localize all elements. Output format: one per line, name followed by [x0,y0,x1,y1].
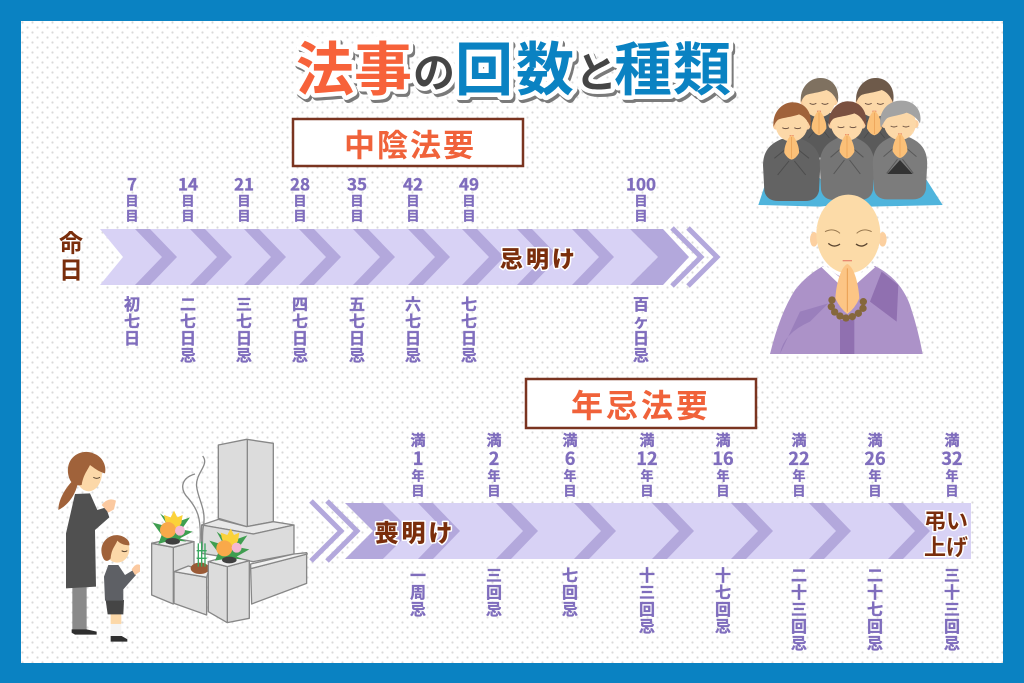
day labels above top timeline: 目 [181,206,195,224]
title: 事 [354,23,412,107]
woman [58,452,116,635]
memorial names below top timeline: 日 [236,325,252,349]
heading box: 中陰法要: 中陰法要 [344,120,476,166]
gravestone [202,439,307,604]
flowers left [153,511,193,545]
year labels above bottom timeline: 22 [788,445,810,471]
memorial names below bottom timeline: 忌 [486,596,502,620]
memorial names below bottom timeline: 忌 [410,596,426,620]
memorial names below top timeline: 忌 [292,342,308,366]
memorial names below top timeline: 日 [461,325,477,349]
memorial names below bottom timeline: 三 [639,579,655,603]
memorial names below bottom timeline: 回 [639,596,655,620]
memorial names below top timeline: 七 [124,308,140,332]
day labels above top timeline: 目 [406,190,420,210]
label: 喪明け: 喪明け [374,514,456,548]
day labels above top timeline: 目 [634,206,648,224]
memorial names below top timeline: 七 [180,308,196,332]
year labels above bottom timeline: 目 [640,480,654,500]
day labels above top timeline: 42 [403,170,423,196]
memorial names below bottom timeline: 忌 [944,630,960,654]
year labels above bottom timeline: 12 [636,445,658,471]
title [296,23,731,107]
title: 法 [296,23,354,107]
memorial names below bottom timeline: 回 [715,596,731,620]
title: 類 [673,23,731,107]
memorial names below top timeline: 忌 [180,342,196,366]
day labels above top timeline: 目 [634,190,648,210]
label: 忌明け: 忌明け [500,240,578,274]
illustration: mother and child at grave [58,439,307,642]
memorial names below bottom timeline [410,562,960,654]
memorial names below bottom timeline: 周 [410,579,426,603]
year labels above bottom timeline: 年 [868,466,882,484]
day labels above top timeline: 14 [178,170,198,196]
memorial names below top timeline: 日 [292,325,308,349]
year labels above bottom timeline: 満 [410,430,426,450]
memorial names below bottom timeline: 十 [867,579,883,603]
memorial names below bottom timeline: 回 [486,579,502,603]
memorial names below top timeline: 忌 [633,342,649,366]
memorial names below bottom timeline: 三 [791,596,807,620]
incense smoke [183,456,205,553]
incense holder [191,542,209,574]
child [101,535,140,642]
day labels above top timeline: 49 [459,170,479,196]
year labels above bottom timeline [410,430,963,500]
memorial names below bottom timeline: 七 [562,562,578,586]
memorial names below bottom timeline: 忌 [791,630,807,654]
year labels above bottom timeline: 1 [413,445,423,471]
year labels above bottom timeline: 目 [945,480,959,500]
memorial names below bottom timeline: 三 [486,562,502,586]
timeline arrow: 年忌法要 [345,503,971,559]
memorial names below top timeline: 日 [124,325,140,349]
year labels above bottom timeline: 16 [712,445,734,471]
memorial names below top timeline: 七 [292,308,308,332]
year labels above bottom timeline: 満 [867,430,883,450]
memorial names below top timeline: 忌 [236,342,252,366]
memorial names below top timeline: 六 [405,291,421,315]
memorial names below top timeline: 五 [349,291,365,315]
label: 命日: 命 [59,224,83,258]
year labels above bottom timeline: 満 [486,430,502,450]
year labels above bottom timeline: 目 [792,480,806,500]
year labels above bottom timeline: 2 [489,445,499,471]
year labels above bottom timeline: 満 [562,430,578,450]
memorial names below bottom timeline: 十 [715,562,731,586]
flower stand left [152,538,208,615]
memorial names below top timeline: 初 [124,291,140,315]
year labels above bottom timeline: 26 [864,445,886,471]
title: の [413,40,455,100]
memorial names below bottom timeline: 十 [944,579,960,603]
title: と [575,40,617,100]
memorial names below top timeline: 日 [349,325,365,349]
memorial names below bottom timeline: 忌 [867,630,883,654]
year labels above bottom timeline: 年 [563,466,577,484]
memorial names below top timeline: 忌 [461,342,477,366]
memorial names below top timeline: 四 [292,291,308,315]
memorial names below bottom timeline: 忌 [639,613,655,637]
year labels above bottom timeline: 32 [941,445,963,471]
heading box: 年忌法要: 年忌法要 [571,381,711,427]
memorial names below bottom timeline: 忌 [715,613,731,637]
year labels above bottom timeline: 目 [868,480,882,500]
day labels above top timeline: 7 [127,170,137,196]
title: 数 [516,23,574,107]
day labels above top timeline: 目 [125,190,139,210]
memorial names below bottom timeline: 回 [867,613,883,637]
memorial names below top timeline [124,291,649,366]
day labels above top timeline [125,170,656,224]
memorial names below bottom timeline: 忌 [562,596,578,620]
day labels above top timeline: 目 [293,206,307,224]
year labels above bottom timeline: 満 [639,430,655,450]
memorial names below bottom timeline: 二 [791,562,807,586]
memorial names below bottom timeline: 一 [410,562,426,586]
illustration: praying family on cushions [758,78,943,207]
double chevrons before bottom timeline [311,501,357,561]
title: 種 [614,23,672,107]
day labels above top timeline: 21 [234,170,254,196]
year labels above bottom timeline: 6 [565,445,575,471]
year labels above bottom timeline: 年 [411,466,425,484]
year labels above bottom timeline: 満 [944,430,960,450]
year labels above bottom timeline: 年 [640,466,654,484]
label: 弔い上げ: 上げ [924,530,968,562]
day labels above top timeline: 目 [181,190,195,210]
year labels above bottom timeline: 年 [945,466,959,484]
year labels above bottom timeline: 目 [411,480,425,500]
memorial names below top timeline: 七 [349,308,365,332]
year labels above bottom timeline: 年 [487,466,501,484]
day labels above top timeline: 目 [237,190,251,210]
label: 弔い上げ [924,504,968,562]
memorial names below top timeline: 七 [236,308,252,332]
memorial names below top timeline: 二 [180,291,196,315]
memorial names below top timeline: 七 [405,308,421,332]
memorial names below bottom timeline: 三 [944,562,960,586]
memorial names below bottom timeline: 三 [944,596,960,620]
day labels above top timeline: 目 [125,206,139,224]
memorial names below top timeline: 三 [236,291,252,315]
memorial names below top timeline: ヶ [633,308,649,332]
year labels above bottom timeline: 目 [563,480,577,500]
year labels above bottom timeline: 満 [791,430,807,450]
memorial names below bottom timeline: 回 [944,613,960,637]
flowers right [209,528,249,563]
memorial names below top timeline: 忌 [349,342,365,366]
memorial names below top timeline: 日 [405,325,421,349]
day labels above top timeline: 目 [462,206,476,224]
title: 回 [455,23,513,107]
day labels above top timeline: 目 [462,190,476,210]
memorial names below top timeline: 七 [461,308,477,332]
label: 命日: 日 [59,250,83,286]
label: 弔い上げ: 弔い [924,504,968,536]
memorial names below top timeline: 忌 [405,342,421,366]
day labels above top timeline: 28 [290,170,310,196]
flower stand right [208,556,249,623]
day labels above top timeline: 目 [293,190,307,210]
label: 命日 [59,224,83,286]
day labels above top timeline: 目 [350,206,364,224]
day labels above top timeline: 目 [350,190,364,210]
memorial names below bottom timeline: 十 [639,562,655,586]
year labels above bottom timeline: 年 [792,466,806,484]
illustration: monk praying [770,195,923,354]
memorial names below bottom timeline: 回 [791,613,807,637]
memorial names below bottom timeline: 七 [715,579,731,603]
day labels above top timeline: 目 [237,206,251,224]
timeline arrow: 中陰法要 [100,228,717,286]
day labels above top timeline: 目 [406,206,420,224]
memorial names below bottom timeline: 七 [867,596,883,620]
day labels above top timeline: 100 [626,170,656,196]
memorial names below top timeline: 日 [633,325,649,349]
heading box: 年忌法要 [526,379,756,428]
year labels above bottom timeline: 満 [715,430,731,450]
day labels above top timeline: 35 [347,170,367,196]
memorial names below top timeline: 百 [633,291,649,315]
heading box: 中陰法要 [293,119,523,166]
memorial names below bottom timeline: 十 [791,579,807,603]
year labels above bottom timeline: 目 [487,480,501,500]
memorial names below bottom timeline: 二 [867,562,883,586]
year labels above bottom timeline: 年 [716,466,730,484]
memorial names below bottom timeline: 回 [562,579,578,603]
year labels above bottom timeline: 目 [716,480,730,500]
memorial names below top timeline: 七 [461,291,477,315]
memorial names below top timeline: 日 [180,325,196,349]
